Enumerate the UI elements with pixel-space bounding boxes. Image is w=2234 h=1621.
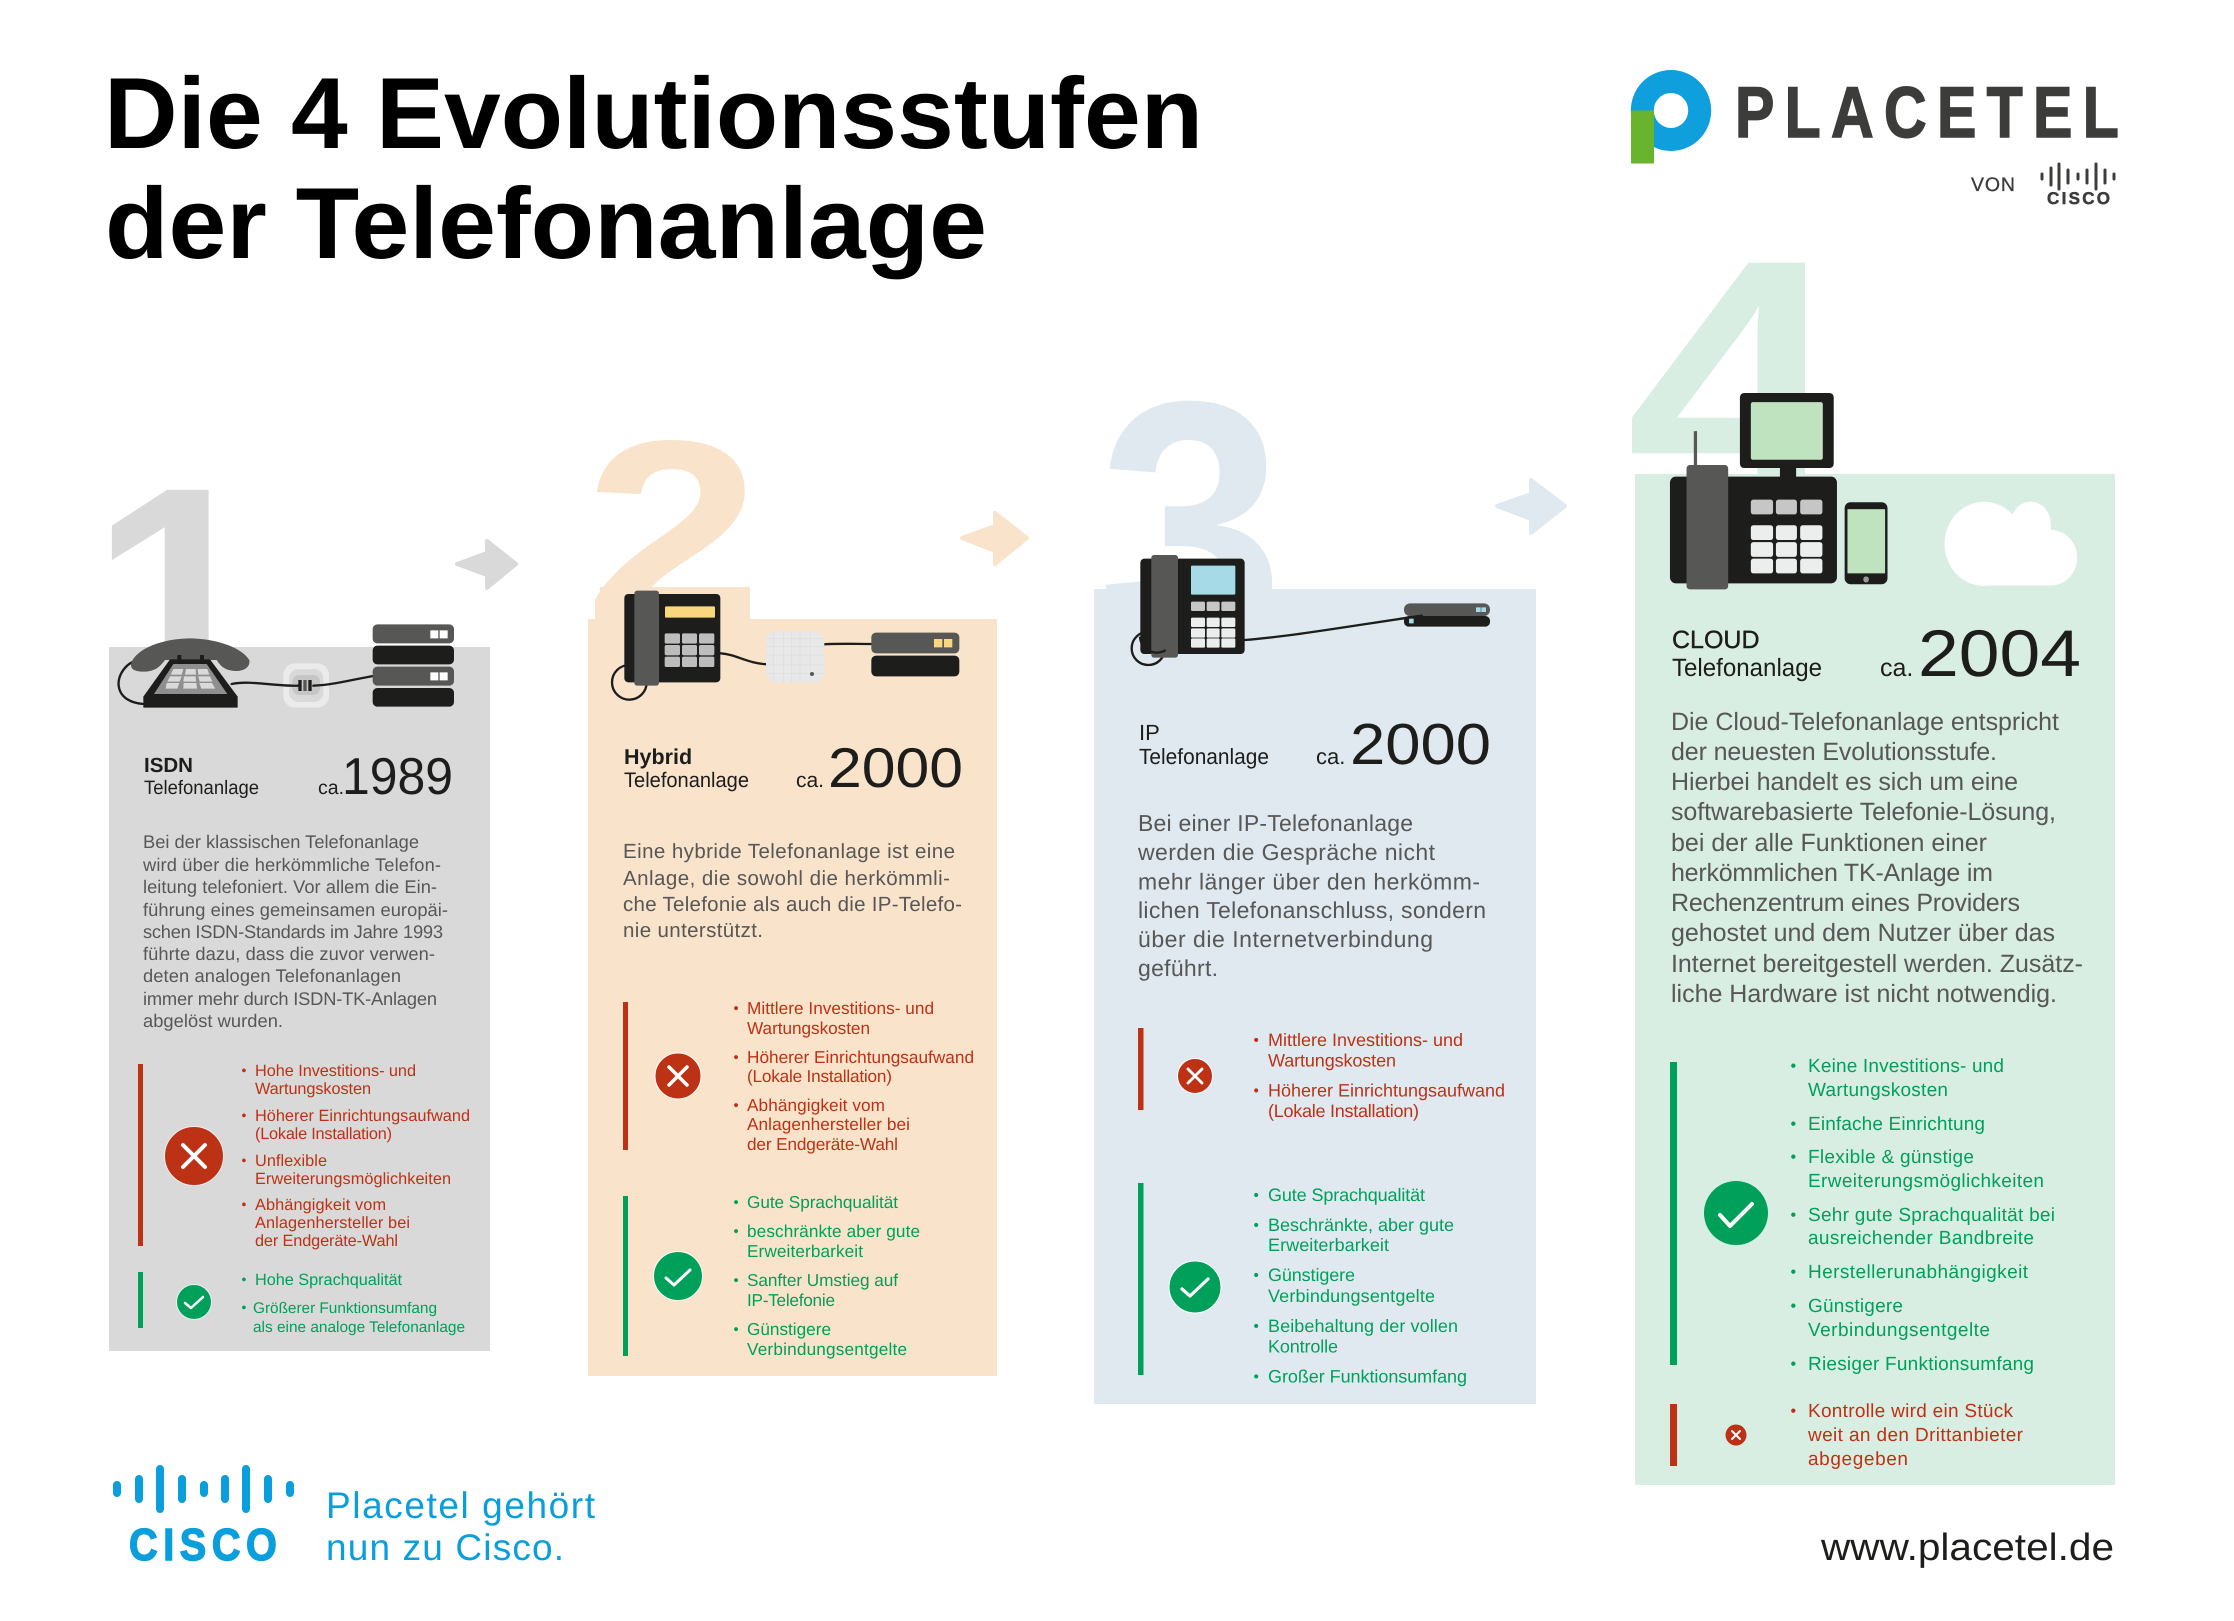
- icon: cross: [164, 1126, 224, 1186]
- text block: IP description: Bei einer IP-Telefonanlage: [1138, 810, 1413, 836]
- advantages: Cloud: •: [1790, 1355, 1796, 1373]
- disadvantages: ISDN: Unflexible: [255, 1152, 327, 1170]
- icon: check: [1169, 1261, 1221, 1313]
- advantages: ISDN: •: [242, 1299, 246, 1315]
- heading: IP: [1139, 720, 1269, 769]
- heading: Cloud: CLOUD: [1672, 626, 1760, 654]
- icon: check: [1704, 1181, 1768, 1245]
- icon: check: [654, 1252, 702, 1300]
- text block: Cloud description: gehostet und dem Nutzer über das: [1671, 919, 2055, 947]
- heading: ISDN: Telefonanlage: [144, 777, 259, 799]
- advantages: Hybrid: Gute Sprachqualität: [747, 1192, 898, 1212]
- text block: ISDN description: immer mehr durch ISDN-TK-Anlagen: [143, 988, 437, 1009]
- logo: Placetel von Cisco: [1631, 73, 2119, 208]
- year: ca. 2000: ca.: [796, 769, 824, 792]
- disadvantages: Cloud: weit an den Drittanbieter: [1807, 1425, 2024, 1446]
- numeral 4: 4: [1626, 187, 1851, 576]
- advantages: ISDN: Hohe Sprachqualität: [255, 1271, 402, 1289]
- advantages: Hybrid: beschränkte aber gute: [747, 1221, 920, 1241]
- wordmark: Cisco: CISCO: [129, 1519, 277, 1570]
- disadvantages: Hybrid: Anlagenhersteller bei: [747, 1114, 910, 1134]
- heading: ISDN: [144, 754, 259, 799]
- year: ca. 2004: 2004: [1918, 616, 2081, 690]
- arrow 3: [1497, 480, 1565, 533]
- disadvantages: ISDN: Wartungskosten: [255, 1080, 371, 1098]
- illustration: desk phone, hybrid box and router: [612, 591, 959, 700]
- text block: Cloud description: softwarebasierte Telefonie-Lösung,: [1671, 798, 2056, 826]
- disadvantages: ISDN: •: [242, 1062, 246, 1078]
- advantages: Hybrid: •: [734, 1322, 739, 1338]
- advantages: Cloud: Verbindungsentgelte: [1808, 1320, 1990, 1341]
- advantages: IP: Beibehaltung der vollen: [1268, 1316, 1458, 1336]
- label: von: VON: [1971, 174, 2015, 196]
- advantages: ISDN: [138, 1271, 465, 1336]
- disadvantages: Hybrid: der Endgeräte-Wahl: [747, 1134, 898, 1154]
- panel: IP: [1094, 555, 1536, 1404]
- disadvantages: Cloud: [1670, 1401, 2024, 1470]
- footer: Cisco logo: [117, 1469, 290, 1570]
- advantages: Hybrid: •: [734, 1273, 739, 1289]
- disadvantages: ISDN: Anlagenhersteller bei: [255, 1214, 410, 1232]
- icon: cross: [1726, 1424, 1746, 1446]
- heading: Cloud: Telefonanlage: [1672, 654, 1822, 682]
- heading: Cloud: [1672, 626, 1822, 682]
- text block: Cloud description: [1671, 708, 2083, 1008]
- text block: IP description: geführt.: [1138, 955, 1218, 981]
- text block: ISDN description: führte dazu, dass die zuvor verwen-: [143, 943, 435, 964]
- arrow 1: [457, 541, 516, 588]
- disadvantages: Cloud: abgegeben: [1808, 1449, 1908, 1470]
- text block: IP description: mehr länger über den herkömm-: [1138, 868, 1480, 894]
- advantages: Cloud: •: [1790, 1297, 1796, 1315]
- advantages: ISDN: Größerer Funktionsumfang: [253, 1300, 437, 1317]
- numeral 1: 1: [90, 420, 268, 778]
- disadvantages: IP: Wartungskosten: [1268, 1050, 1396, 1070]
- disadvantages: ISDN: [138, 1062, 470, 1250]
- footer: website: www.placetel.de: [1820, 1527, 2114, 1569]
- panel: Cloud: [1635, 393, 2115, 1485]
- text block: Hybrid description: che Telefonie als auch die IP-Telefo-: [623, 893, 962, 916]
- text block: Cloud description: liche Hardware ist nicht notwendig.: [1671, 980, 2057, 1008]
- advantages: Cloud: •: [1790, 1263, 1796, 1281]
- wordmark: small Cisco: CISCO: [2047, 189, 2110, 208]
- footer: tagline: Placetel gehört: [326, 1485, 596, 1526]
- illustration: cloud phone, smartphone and cloud: [1670, 393, 2077, 589]
- illustration: rotary phone, socket and server: [119, 624, 454, 708]
- year: ca. 2000: 2000: [828, 736, 963, 799]
- advantages: Cloud: Günstigere: [1808, 1296, 1903, 1317]
- year: ca. 2000: ca.: [1316, 744, 1345, 769]
- disadvantages: IP: Höherer Einrichtungsaufwand: [1268, 1080, 1505, 1100]
- advantages: Cloud: Flexible & günstige: [1808, 1147, 1974, 1168]
- advantages: Hybrid: Sanfter Umstieg auf: [747, 1270, 898, 1290]
- disadvantages: Hybrid: •: [734, 1001, 739, 1017]
- advantages: Cloud: •: [1790, 1148, 1796, 1166]
- disadvantages: Hybrid: Wartungskosten: [747, 1018, 870, 1038]
- panel: ISDN: [109, 624, 490, 1351]
- advantages: IP: •: [1254, 1267, 1259, 1284]
- advantages: IP: Erweiterbarkeit: [1268, 1235, 1389, 1255]
- advantages: IP: Großer Funktionsumfang: [1268, 1366, 1467, 1386]
- advantages: Cloud: •: [1790, 1057, 1796, 1075]
- advantages: Hybrid: Günstigere: [747, 1319, 831, 1339]
- year: ca. 2004: ca.: [1880, 654, 1913, 682]
- advantages: Cloud: Sehr gute Sprachqualität bei: [1808, 1205, 2055, 1226]
- disadvantages: Hybrid: •: [734, 1098, 739, 1114]
- disadvantages: Hybrid: Höherer Einrichtungsaufwand: [747, 1047, 974, 1067]
- text block: Cloud description: der neuesten Evolutionsstufe.: [1671, 738, 1997, 766]
- advantages: Hybrid: Verbindungsentgelte: [747, 1339, 907, 1359]
- year: ca. 2000: 2000: [1350, 712, 1491, 777]
- disadvantages: ISDN: Höherer Einrichtungsaufwand: [255, 1107, 470, 1125]
- advantages: Cloud: [1670, 1056, 2055, 1375]
- disadvantages: ISDN: •: [242, 1152, 246, 1168]
- advantages: Hybrid: IP-Telefonie: [747, 1290, 835, 1310]
- advantages: IP: Beschränkte, aber gute: [1268, 1215, 1454, 1235]
- text block: Hybrid description: nie unterstützt.: [623, 919, 763, 942]
- disadvantages: Hybrid: Abhängigkeit vom: [747, 1095, 885, 1115]
- text block: Cloud description: herkömmlichen TK-Anlage im: [1671, 859, 1993, 887]
- advantages: Cloud: •: [1790, 1206, 1796, 1224]
- icon: Placetel P mark: [1631, 82, 1700, 164]
- text block: ISDN description: [142, 831, 448, 1031]
- title: der Telefonanlage: [105, 168, 987, 280]
- advantages: ISDN: •: [242, 1271, 246, 1287]
- illustration: IP phone and router: [1132, 555, 1490, 665]
- advantages: IP: [1138, 1183, 1467, 1386]
- arrow 2: [962, 513, 1027, 564]
- advantages: IP: Günstigere: [1268, 1265, 1355, 1285]
- disadvantages: ISDN: •: [242, 1196, 246, 1212]
- icon: small Cisco bars: [2042, 164, 2114, 189]
- disadvantages: Hybrid: (Lokale Installation): [747, 1066, 892, 1086]
- disadvantages: Hybrid: Mittlere Investitions- und: [747, 998, 934, 1018]
- advantages: Cloud: Riesiger Funktionsumfang: [1808, 1354, 2034, 1375]
- text block: ISDN description: deten analogen Telefonanlagen: [143, 965, 401, 986]
- disadvantages: Hybrid: •: [734, 1050, 739, 1066]
- text block: Cloud description: Hierbei handelt es sich um eine: [1671, 768, 2018, 796]
- advantages: ISDN: als eine analoge Telefonanlage: [253, 1319, 465, 1336]
- advantages: Hybrid: Erweiterbarkeit: [747, 1241, 863, 1261]
- advantages: Cloud: Erweiterungsmöglichkeiten: [1808, 1171, 2044, 1192]
- year: ca. 1989: ca.: [318, 777, 344, 799]
- text block: Hybrid description: [623, 840, 962, 942]
- advantages: Hybrid: •: [734, 1195, 739, 1211]
- disadvantages: ISDN: (Lokale Installation): [255, 1125, 392, 1143]
- disadvantages: ISDN: Erweiterungsmöglichkeiten: [255, 1170, 451, 1188]
- text block: IP description: werden die Gespräche nicht: [1137, 839, 1436, 865]
- title: [104, 58, 1203, 280]
- footer: tagline: nun zu Cisco.: [326, 1527, 564, 1568]
- advantages: IP: Kontrolle: [1268, 1336, 1338, 1356]
- advantages: Cloud: Wartungskosten: [1808, 1080, 1948, 1101]
- year: ca. 1989: 1989: [342, 748, 453, 806]
- heading: Hybrid: Hybrid: [624, 745, 692, 769]
- icon: Cisco bars: [117, 1469, 290, 1509]
- disadvantages: IP: (Lokale Installation): [1268, 1101, 1419, 1121]
- heading: Hybrid: Telefonanlage: [624, 769, 749, 792]
- heading: Hybrid: [624, 745, 749, 792]
- text block: ISDN description: wird über die herkömmliche Telefon-: [142, 854, 441, 875]
- disadvantages: ISDN: Hohe Investitions- und: [255, 1062, 416, 1080]
- advantages: IP: Gute Sprachqualität: [1268, 1185, 1425, 1205]
- disadvantages: ISDN: •: [242, 1107, 246, 1123]
- text block: Cloud description: Internet bereitgestell werden. Zusätz-: [1671, 950, 2083, 978]
- disadvantages: Cloud: •: [1790, 1402, 1796, 1420]
- text block: Hybrid description: Anlage, die sowohl die herkömmli-: [623, 867, 950, 890]
- advantages: Cloud: Herstellerunabhängigkeit: [1808, 1262, 2029, 1283]
- advantages: IP: •: [1254, 1318, 1259, 1335]
- heading: IP: Telefonanlage: [1139, 744, 1269, 769]
- text block: IP description: über die Internetverbindung: [1138, 926, 1433, 952]
- advantages: Cloud: Einfache Einrichtung: [1808, 1114, 1985, 1135]
- text block: ISDN description: leitung telefoniert. Vor allem die Ein-: [143, 876, 437, 897]
- text block: Cloud description: Die Cloud-Telefonanlage entspricht: [1671, 708, 2059, 736]
- advantages: IP: •: [1254, 1217, 1259, 1234]
- text block: IP description: [1137, 810, 1486, 981]
- text block: Hybrid description: Eine hybride Telefonanlage ist eine: [623, 840, 955, 863]
- disadvantages: IP: •: [1254, 1082, 1259, 1100]
- advantages: Cloud: ausreichender Bandbreite: [1808, 1228, 2034, 1249]
- text block: ISDN description: führung eines gemeinsamen europäi-: [143, 899, 448, 920]
- disadvantages: IP: [1138, 1028, 1505, 1121]
- advantages: IP: •: [1254, 1368, 1259, 1386]
- text block: ISDN description: schen ISDN-Standards im Jahre 1993: [143, 921, 443, 942]
- text block: IP description: lichen Telefonanschluss, sondern: [1138, 897, 1486, 923]
- title: Die 4 Evolutionsstufen: [104, 58, 1203, 170]
- disadvantages: ISDN: Abhängigkeit vom: [255, 1196, 386, 1214]
- heading: ISDN: ISDN: [144, 754, 193, 777]
- icon: cross: [1178, 1058, 1212, 1094]
- advantages: IP: Verbindungsentgelte: [1268, 1286, 1435, 1306]
- text block: Cloud description: bei der alle Funktionen einer: [1671, 829, 1987, 857]
- advantages: Hybrid: [623, 1192, 920, 1359]
- heading: IP: IP: [1139, 720, 1160, 745]
- icon: check: [176, 1284, 212, 1320]
- text block: ISDN description: abgelöst wurden.: [143, 1010, 283, 1031]
- wordmark: Placetel: PLACETEL: [1735, 73, 2119, 153]
- disadvantages: ISDN: der Endgeräte-Wahl: [255, 1232, 398, 1250]
- advantages: Cloud: Keine Investitions- und: [1808, 1056, 2004, 1077]
- numeral 3: 3: [1098, 327, 1284, 729]
- advantages: Cloud: •: [1790, 1115, 1796, 1133]
- disadvantages: IP: Mittlere Investitions- und: [1268, 1030, 1463, 1050]
- disadvantages: Cloud: Kontrolle wird ein Stück: [1808, 1401, 2014, 1422]
- advantages: IP: •: [1254, 1187, 1259, 1204]
- disadvantages: IP: •: [1254, 1032, 1259, 1049]
- footer: tagline: [326, 1485, 596, 1568]
- numeral 2: 2: [584, 386, 761, 682]
- advantages: Hybrid: •: [734, 1224, 739, 1240]
- text block: ISDN description: Bei der klassischen Telefonanlage: [143, 831, 419, 852]
- disadvantages: Hybrid: [623, 998, 974, 1154]
- panel: Hybrid: [588, 591, 997, 1376]
- icon: cross: [655, 1053, 701, 1099]
- text block: Cloud description: Rechenzentrum eines Providers: [1671, 889, 2020, 917]
